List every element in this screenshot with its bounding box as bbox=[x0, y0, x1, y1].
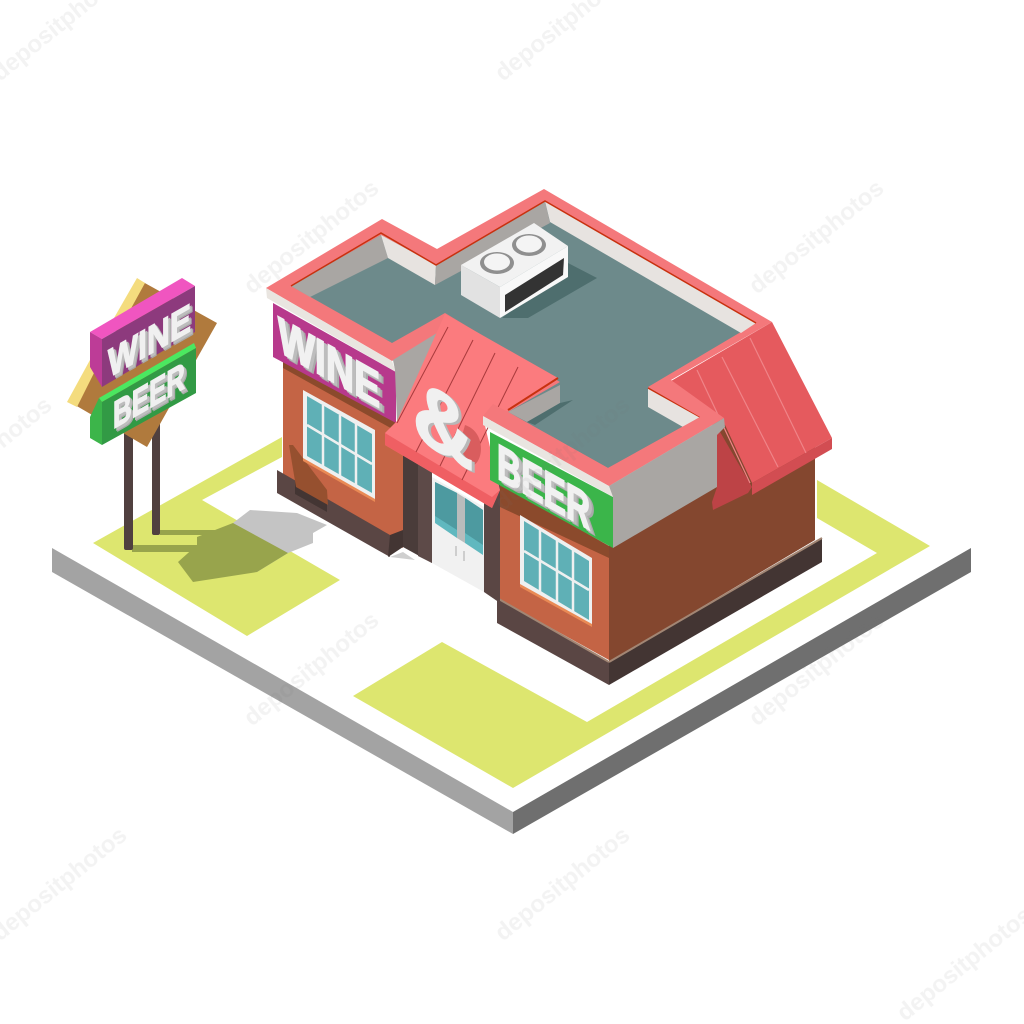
building bbox=[266, 189, 832, 685]
left wall bbox=[283, 365, 403, 548]
watermarks: depositphotos bbox=[744, 607, 889, 732]
wine text: WINE bbox=[111, 298, 194, 390]
roof rim bbox=[266, 189, 772, 486]
sign poles bbox=[124, 420, 160, 550]
beer lettering bbox=[497, 433, 595, 546]
awning bbox=[385, 314, 558, 508]
beer text: BEER bbox=[113, 354, 185, 437]
watermarks: depositphotos bbox=[490, 822, 635, 947]
watermarks: depositphotos bbox=[239, 607, 384, 732]
brown star backing bbox=[75, 282, 217, 447]
beer lettering: BEER bbox=[497, 433, 590, 541]
beer sign panel bbox=[490, 432, 613, 548]
wine text: WINE bbox=[110, 297, 193, 389]
side wall bbox=[609, 420, 815, 662]
roadside sign bbox=[67, 278, 217, 550]
beer text: BEER bbox=[116, 357, 188, 440]
side slope roof bbox=[671, 322, 832, 495]
watermarks: depositphotos bbox=[744, 175, 889, 300]
beer fascia bbox=[483, 416, 613, 497]
side plinth bbox=[609, 538, 822, 685]
left plinth bbox=[277, 445, 403, 557]
ampersand: & bbox=[416, 358, 476, 493]
building shadow on ground bbox=[132, 510, 415, 582]
parapet inner walls bbox=[291, 201, 756, 427]
slope roof underside bbox=[712, 425, 752, 510]
ampersand shadow bbox=[458, 425, 481, 466]
beer panel bbox=[90, 343, 196, 445]
right window bbox=[520, 515, 592, 627]
front plinth right bbox=[497, 598, 609, 685]
wine text: WINE bbox=[108, 295, 191, 387]
front wall right bbox=[497, 484, 822, 662]
grey parapet side bbox=[609, 418, 725, 548]
front wing rim bbox=[483, 380, 724, 486]
shaded band under wine sign bbox=[283, 355, 396, 431]
flat roof surface bbox=[291, 201, 756, 468]
grass: left lawn bbox=[93, 437, 340, 636]
beer text: BEER bbox=[115, 356, 187, 439]
door recess bbox=[403, 440, 500, 603]
wine lettering: WINE bbox=[278, 306, 380, 419]
beer lettering: BEER bbox=[502, 438, 595, 546]
beer lettering: BEER bbox=[500, 436, 593, 544]
left window bbox=[303, 390, 375, 502]
ground slab bbox=[52, 286, 971, 834]
wine sign panel bbox=[273, 303, 396, 423]
beer text bbox=[113, 354, 188, 440]
wine lettering: WINE bbox=[281, 309, 383, 422]
yellow edges bbox=[67, 278, 145, 407]
door bbox=[432, 477, 484, 592]
wine panel bbox=[90, 278, 195, 387]
grass: right lawn bbox=[353, 480, 930, 788]
watermarks: depositphotos bbox=[239, 175, 384, 300]
rooftop AC unit bbox=[461, 223, 597, 318]
ampersand: & bbox=[413, 356, 473, 491]
wine fascia bbox=[266, 288, 396, 372]
wine lettering: WINE bbox=[283, 311, 385, 424]
grey side below awning bbox=[393, 328, 445, 422]
watermarks: depositphotos bbox=[490, 392, 635, 517]
